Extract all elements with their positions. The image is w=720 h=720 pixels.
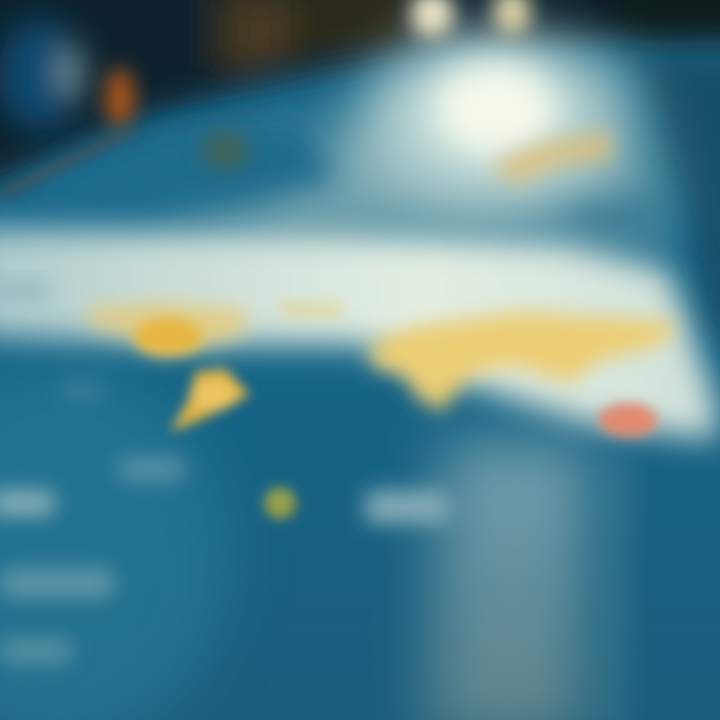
- band shading left: [0, 280, 50, 302]
- yellow continent north fragment: [275, 300, 345, 318]
- right dark blue edge: [630, 50, 720, 390]
- brown smudge: [201, 130, 249, 170]
- upper yellow patch: [490, 130, 612, 185]
- green spot: [264, 487, 296, 519]
- light glare: [370, 35, 610, 205]
- diagonal edge stroke: [0, 130, 130, 195]
- faint sea labels: [0, 382, 450, 664]
- top lamps: [410, 0, 531, 38]
- orange object: [105, 68, 135, 128]
- yellow continent right: [370, 312, 680, 412]
- upper map sheet: [150, 60, 670, 240]
- yellow continent core: [134, 318, 202, 354]
- coral patch: [598, 403, 658, 437]
- beam streak: [595, 450, 630, 720]
- light map band: [0, 228, 720, 440]
- dark top band: [0, 0, 720, 190]
- left sea lightening: [0, 370, 230, 720]
- upper blue sea patch: [20, 120, 680, 250]
- upper-left blue object: [0, 20, 82, 130]
- yellow continent left: [85, 302, 250, 355]
- light beam: [425, 440, 590, 720]
- yellow continent south: [170, 368, 250, 432]
